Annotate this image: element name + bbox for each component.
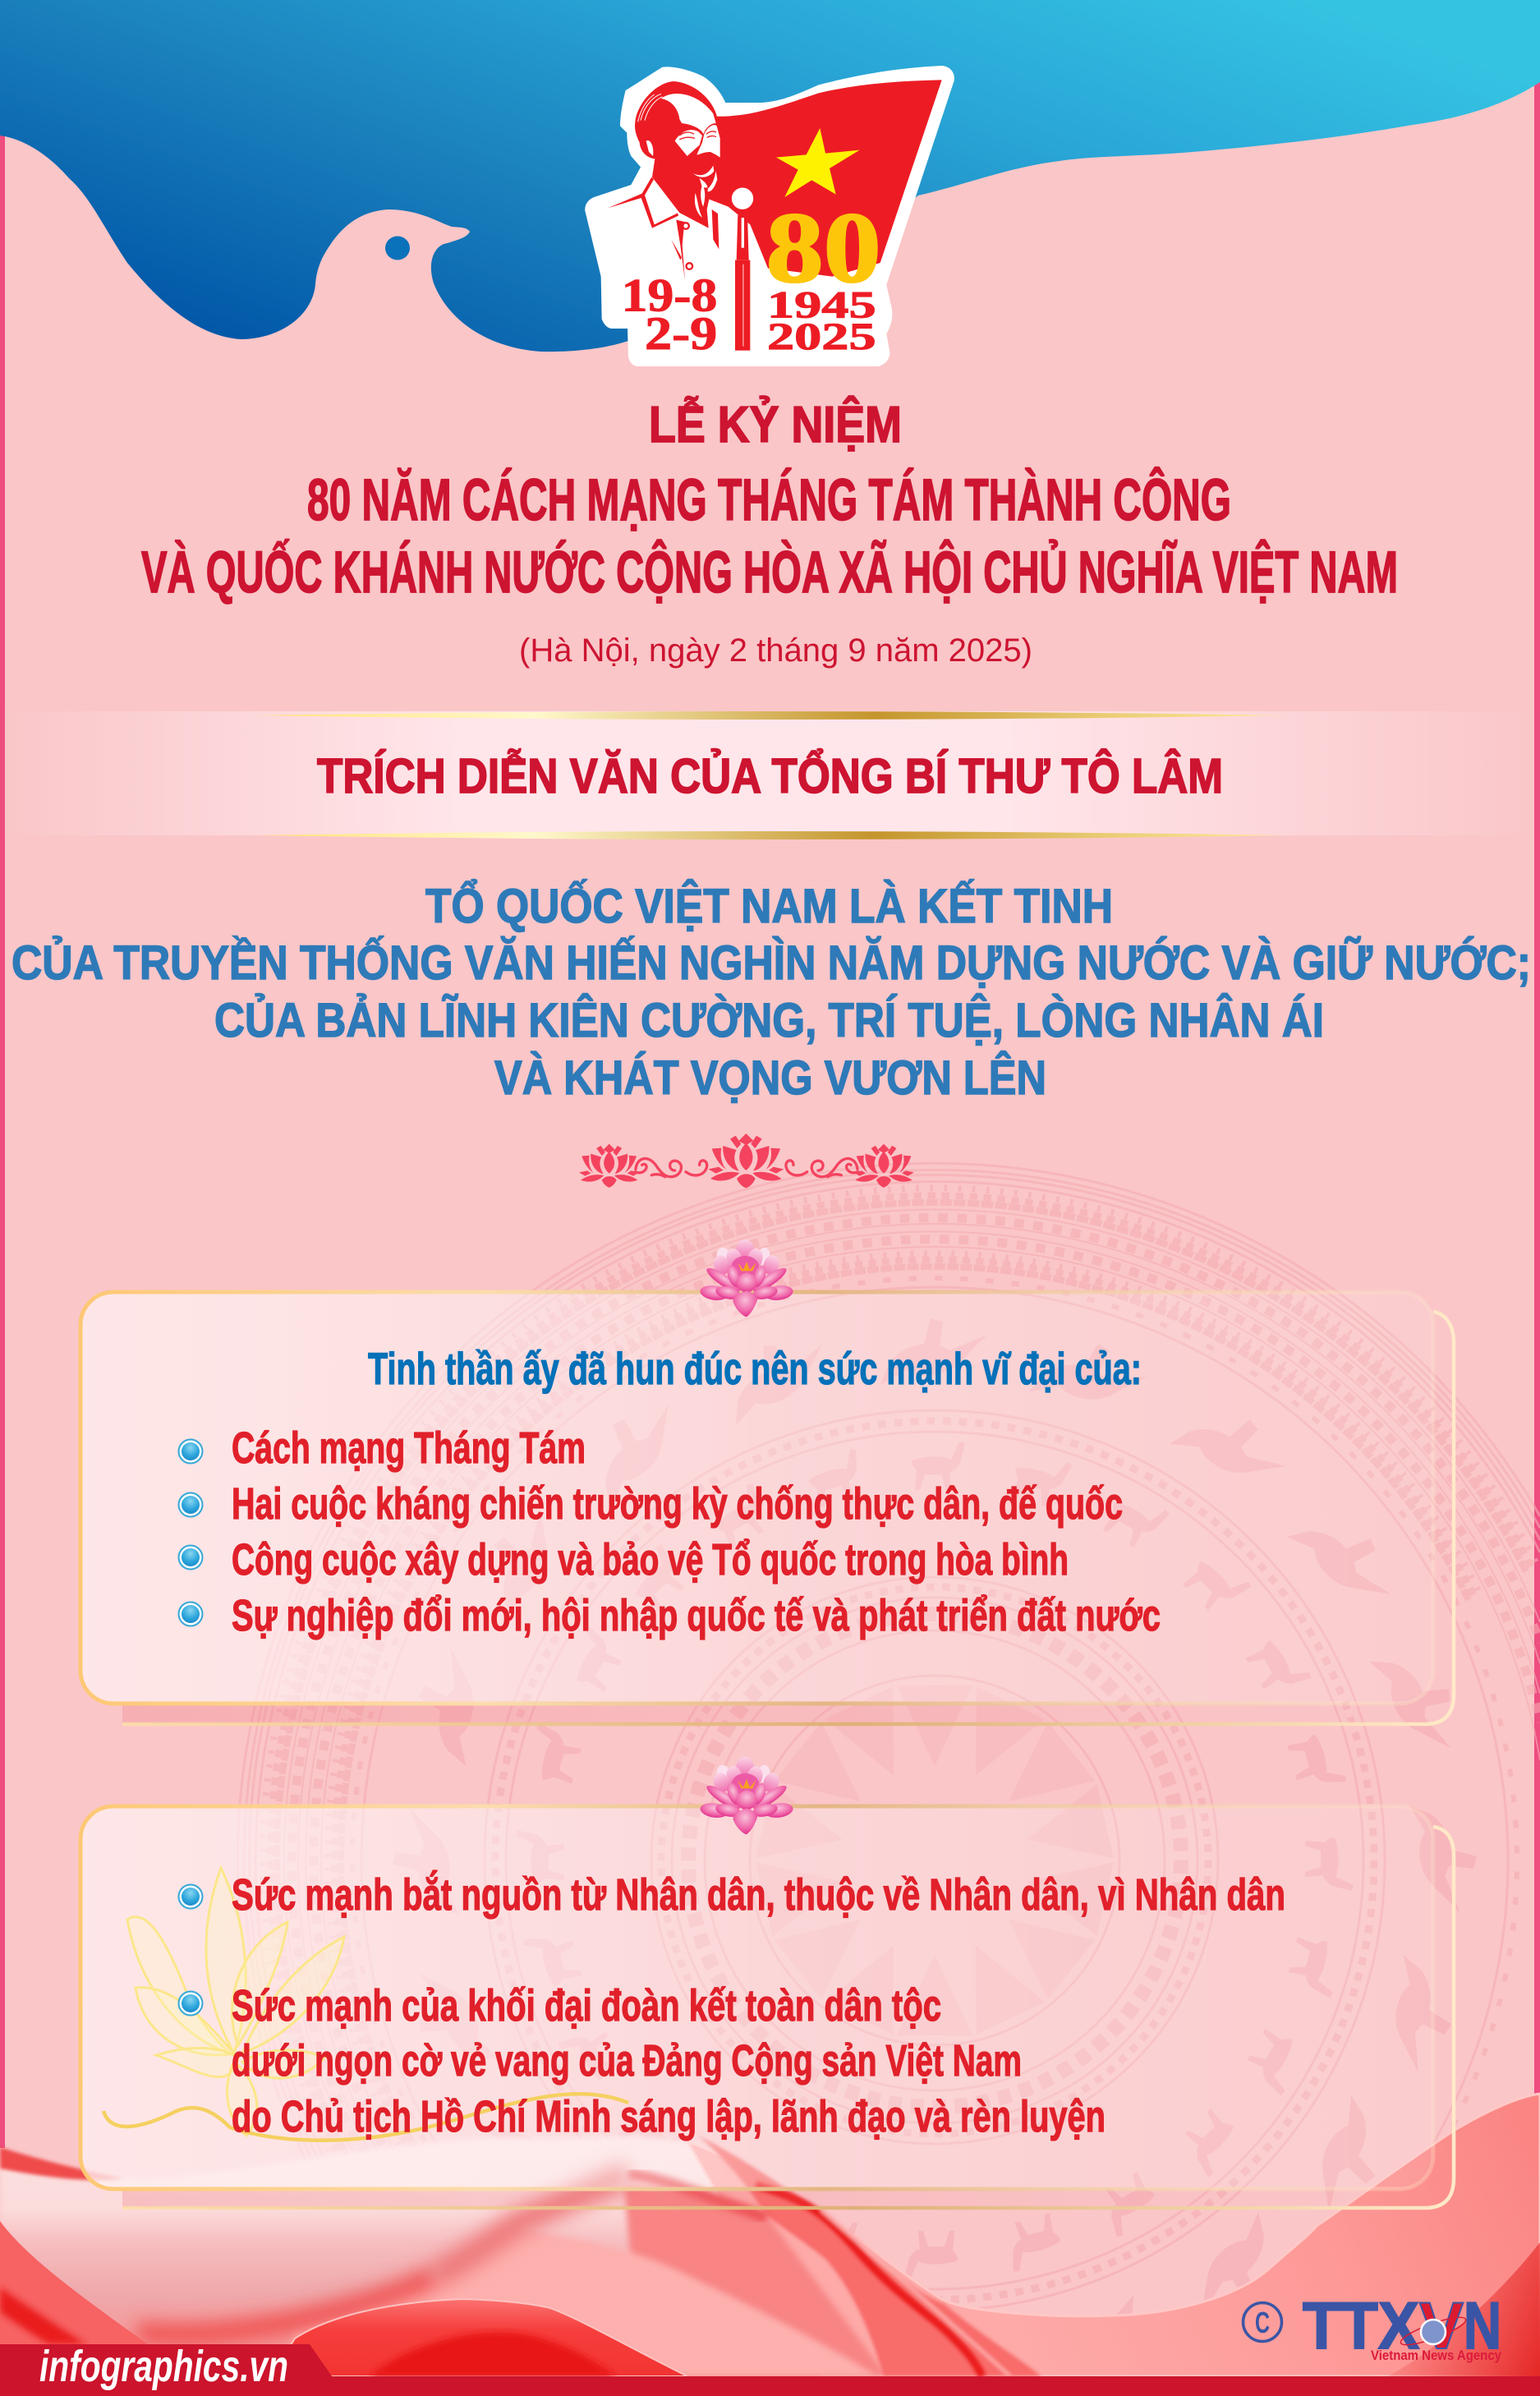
speech heading: TRÍCH DIỄN VĂN CỦA TỔNG BÍ THƯ TÔ LÂM — [317, 748, 1223, 803]
panel 1 rear frame — [122, 1312, 1454, 1724]
lower right corner red — [1388, 2242, 1540, 2376]
top left red streak — [0, 2147, 123, 2180]
bottom red ribbon background — [0, 2094, 1540, 2376]
pink lotus panel 1 — [699, 1239, 794, 1317]
heading band — [0, 711, 1540, 839]
drum background pattern — [237, 1163, 1540, 2396]
logo: 80 years emblem — [585, 66, 954, 366]
logo dates: 1945 — [767, 284, 876, 327]
right salmon ribbon — [687, 2094, 1540, 2376]
agency english name: Vietnam News Agency — [1371, 2348, 1501, 2363]
logo microphone — [730, 186, 755, 351]
TTXVN wordmark: N — [1464, 2289, 1501, 2363]
logo dates: 19-8 — [622, 270, 717, 321]
panel 1 list — [177, 1423, 1161, 1640]
copyright symbol — [1243, 2303, 1281, 2341]
list item 3 — [177, 1535, 1069, 1584]
logo white sticker outline — [585, 66, 954, 366]
diagonal streaks — [756, 2185, 1010, 2376]
list item 1 — [177, 1423, 586, 1473]
list item 3: Công cuộc xây dựng và bảo vệ Tổ quốc trong hòa bình — [232, 1535, 1069, 1584]
diagonal red band — [698, 2136, 1041, 2376]
wave bright core — [370, 2332, 616, 2376]
quote headline — [11, 880, 1531, 1105]
panel 2 list — [177, 1870, 1285, 2141]
strength item 2: Sức mạnh của khối đại đoàn kết toàn dân tộc — [232, 1981, 941, 2030]
footer bar — [0, 2342, 1540, 2396]
logo dates — [622, 270, 876, 360]
strength item 2: do Chủ tịch Hồ Chí Minh sáng lập, lãnh đạo và rèn luyện — [232, 2092, 1106, 2141]
logo red flag — [704, 80, 942, 277]
quote headline: TỔ QUỐC VIỆT NAM LÀ KẾT TINH — [425, 880, 1113, 933]
list item 1: Cách mạng Tháng Tám — [232, 1423, 586, 1473]
logo number 80: 80 — [766, 192, 881, 304]
list item 2: Hai cuộc kháng chiến trường kỳ chống thực dân, đế quốc — [232, 1479, 1123, 1529]
pale ribbon fold — [0, 2136, 864, 2376]
TTXVN wordmark — [1303, 2289, 1501, 2363]
date line: (Hà Nội, ngày 2 tháng 9 năm 2025) — [519, 632, 1032, 669]
TTXVN wordmark: TTX — [1303, 2289, 1419, 2363]
logo dates: 2025 — [767, 315, 876, 358]
panel 2 glass card — [80, 1806, 1433, 2189]
title block — [141, 397, 1398, 605]
list item 4: Sự nghiệp đổi mới, hội nhập quốc tế và phát triển đất nước — [232, 1591, 1161, 1640]
central red wave — [271, 2299, 687, 2376]
copyright symbol: C — [1255, 2306, 1270, 2339]
title block: LỄ KỶ NIỆM — [649, 397, 902, 453]
dove eye — [385, 237, 410, 260]
yellow line-art lotus — [103, 1868, 628, 2141]
TTXVN wordmark: V — [1419, 2289, 1464, 2363]
agency logo — [1243, 2289, 1501, 2363]
list item 2 — [177, 1479, 1123, 1529]
under leaf — [624, 2185, 887, 2376]
blue dove sky shape — [0, 0, 1540, 352]
logo yellow star — [776, 128, 860, 197]
panel 1 heading: Tinh thần ấy đã hun đúc nên sức mạnh vĩ đại của: — [368, 1343, 1142, 1394]
quote headline: VÀ KHÁT VỌNG VƯƠN LÊN — [494, 1051, 1046, 1105]
strength item 2 — [177, 1981, 1106, 2141]
panel 1 glass card — [80, 1292, 1433, 1704]
pale salmon leaf — [279, 2230, 877, 2376]
quote headline: CỦA BẢN LĨNH KIÊN CƯỜNG, TRÍ TUỆ, LÒNG NHÂN ÁI — [214, 994, 1324, 1047]
soft fold shadow — [137, 2174, 766, 2334]
site name: infographics.vn — [39, 2342, 288, 2391]
left red drape — [0, 2221, 148, 2344]
left bright streak — [0, 2288, 86, 2344]
lotus ornament divider — [579, 1134, 914, 1188]
strength item 2: dưới ngọn cờ vẻ vang của Đảng Cộng sản Việt Nam — [232, 2036, 1022, 2086]
pink lotus panel 2 — [699, 1757, 794, 1834]
logo dates: 2-9 — [645, 309, 717, 360]
logo portrait — [608, 81, 720, 281]
panel 2 rear frame — [122, 1827, 1454, 2208]
